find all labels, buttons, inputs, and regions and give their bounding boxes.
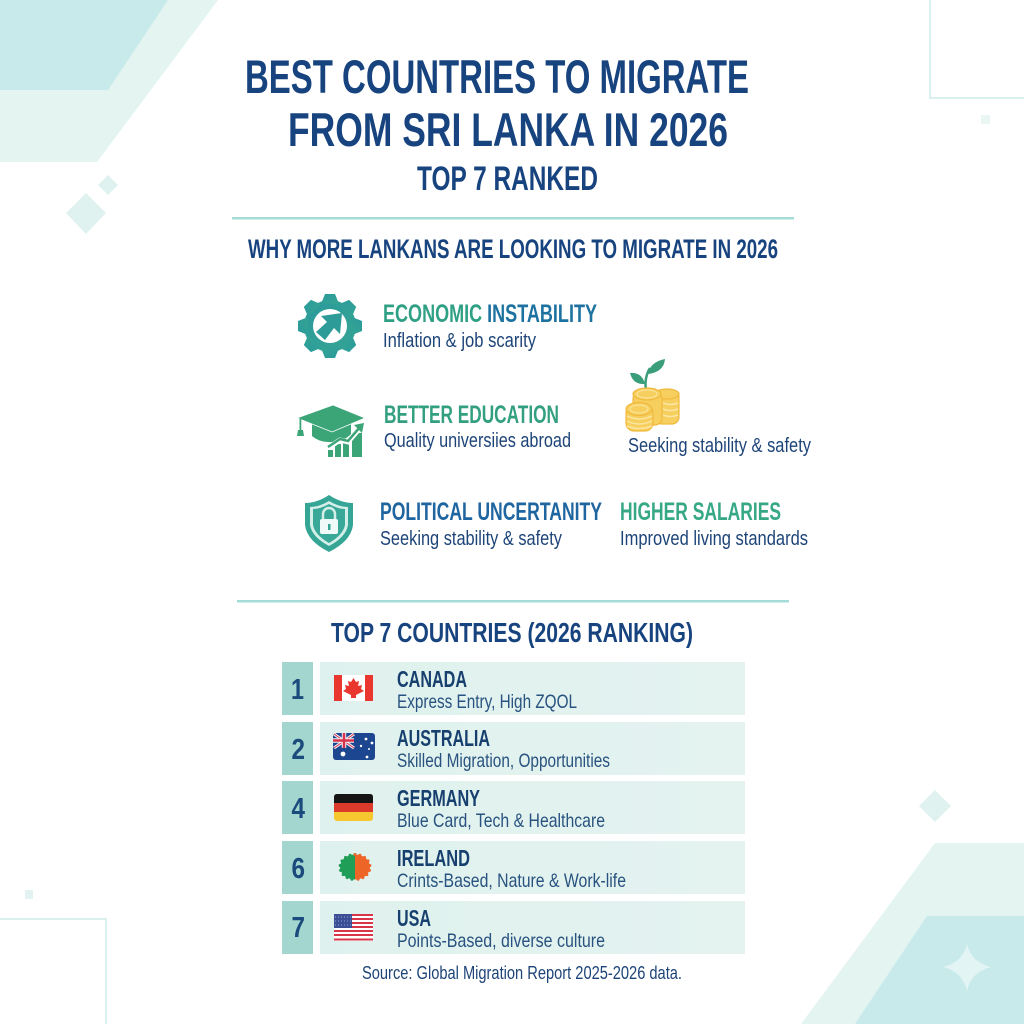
reason: higher salaries: HIGHER SALARIES bbox=[620, 498, 781, 526]
ranking row: Canada: Express Entry, High ZQOL bbox=[397, 691, 577, 713]
reason: higher salaries: Improved living standards bbox=[620, 528, 808, 550]
icon: flag of Germany bbox=[334, 794, 373, 821]
ranking row: Canada: CANADA bbox=[397, 666, 467, 692]
reason: higher salaries bbox=[620, 498, 808, 550]
reason: better education: BETTER EDUCATION bbox=[384, 401, 559, 429]
ranking row: Germany bbox=[282, 781, 745, 834]
reason: economic instability: Inflation & job scarity bbox=[383, 330, 536, 352]
ranking row: Germany: GERMANY bbox=[397, 785, 480, 811]
ranking row: USA: USA bbox=[397, 905, 431, 931]
icon: gear with arrow bbox=[298, 294, 362, 358]
ranking row: Germany: 4 bbox=[292, 793, 305, 825]
icon: shield with padlock bbox=[305, 495, 353, 552]
background decoration: top-left shapes bbox=[0, 0, 218, 234]
ranking row: Ireland: Crints-Based, Nature & Work-life bbox=[397, 870, 626, 892]
reason: economic instability: ECONOMIC INSTABILITY bbox=[383, 300, 597, 328]
reason: better education bbox=[297, 401, 571, 457]
ranking row: Australia bbox=[282, 722, 745, 775]
icon: flag of Australia bbox=[333, 733, 375, 760]
icon: graduation cap with growth chart bbox=[297, 405, 366, 457]
icon: flag of USA bbox=[334, 914, 373, 941]
ranking row: Australia: Skilled Migration, Opportunities bbox=[397, 750, 610, 772]
reason: political uncertainty: POLITICAL UNCERTANITY bbox=[380, 498, 602, 526]
reason: seeking stability with coins: Seeking stability & safety bbox=[628, 435, 811, 457]
ranking row: Canada: 1 bbox=[291, 674, 304, 706]
ranking row: USA bbox=[282, 901, 745, 954]
title: TOP 7 RANKED bbox=[417, 160, 598, 198]
reason: political uncertainty bbox=[305, 495, 602, 552]
ranking row: USA: Points-Based, diverse culture bbox=[397, 930, 605, 952]
icon: flag of Canada bbox=[334, 675, 373, 701]
ranking row: Canada bbox=[282, 662, 745, 715]
ranking row: Ireland: 6 bbox=[292, 853, 305, 885]
reason: economic instability bbox=[298, 294, 597, 358]
ranking row: Australia: AUSTRALIA bbox=[397, 725, 490, 751]
reason: better education: Quality universiies abroad bbox=[384, 430, 571, 452]
ranking row: Ireland bbox=[282, 841, 745, 894]
heading: top 7 countries: TOP 7 COUNTRIES (2026 RANKING) bbox=[331, 617, 693, 648]
title bbox=[245, 50, 749, 198]
reason: seeking stability with coins bbox=[626, 359, 811, 457]
background decoration: top-right outline bbox=[930, 0, 1024, 124]
heading: why migrate: WHY MORE LANKANS ARE LOOKING TO MIGRATE IN 2026 bbox=[248, 234, 778, 264]
icon: flag of Ireland bbox=[340, 854, 370, 880]
ranking row: USA: 7 bbox=[292, 912, 305, 944]
ranking row: Ireland: IRELAND bbox=[397, 845, 470, 871]
title: BEST COUNTRIES TO MIGRATE bbox=[245, 50, 749, 103]
reason: political uncertainty: Seeking stability & safety bbox=[380, 528, 562, 550]
ranking row: Germany: Blue Card, Tech & Healthcare bbox=[397, 810, 605, 832]
background decoration: bottom-left outline bbox=[0, 890, 106, 1024]
title: FROM SRI LANKA IN 2026 bbox=[288, 103, 728, 156]
ranking row: Australia: 2 bbox=[292, 734, 305, 766]
icon: coins with sprout bbox=[626, 359, 679, 431]
background decoration: bottom-right shapes bbox=[801, 790, 1024, 1024]
source note: Source: Global Migration Report 2025-2026 data. bbox=[362, 963, 682, 983]
